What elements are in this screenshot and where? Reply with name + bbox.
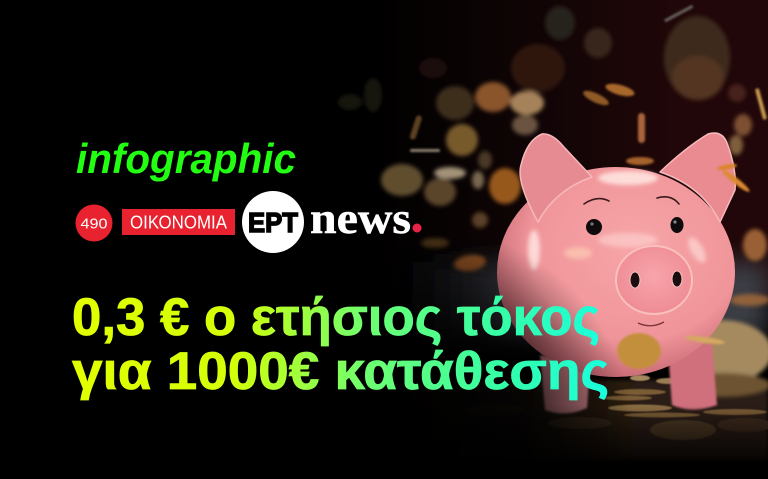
headline line 1: 0,3 € ο ετήσιος τόκος bbox=[72, 288, 600, 347]
lower-left and bottom fade bbox=[0, 225, 768, 479]
left ear bbox=[520, 134, 592, 222]
headline line 2: για 1000€ κατάθεσης bbox=[72, 342, 609, 401]
infographic label: infographic bbox=[76, 135, 296, 182]
headline bbox=[72, 288, 609, 401]
pig body bbox=[497, 167, 735, 377]
nostrils bbox=[630, 272, 640, 288]
logo: ΕΡΤ news bbox=[242, 191, 422, 253]
coin pile bbox=[370, 294, 768, 460]
falling coins near pig bbox=[617, 163, 751, 369]
section label: ΟΙΚΟΝΟΜΙΑ: ΟΙΚΟΝΟΜΙΑ bbox=[130, 212, 227, 232]
badge: 490: 490 bbox=[80, 216, 108, 232]
mouth bbox=[638, 322, 664, 326]
right ear bbox=[660, 133, 735, 222]
icon: piggy bank bbox=[497, 133, 751, 414]
brows bbox=[584, 199, 609, 204]
logo: ΕΡΤ news: ΕΡΤ bbox=[248, 207, 298, 238]
logo: ΕΡΤ news: news bbox=[310, 194, 411, 243]
badge: 490 bbox=[76, 204, 112, 242]
highlights bbox=[528, 171, 709, 270]
eyes bbox=[586, 219, 602, 235]
legs bbox=[540, 342, 717, 414]
photo background: bokeh coins bbox=[338, 0, 768, 460]
snout bbox=[616, 246, 692, 314]
